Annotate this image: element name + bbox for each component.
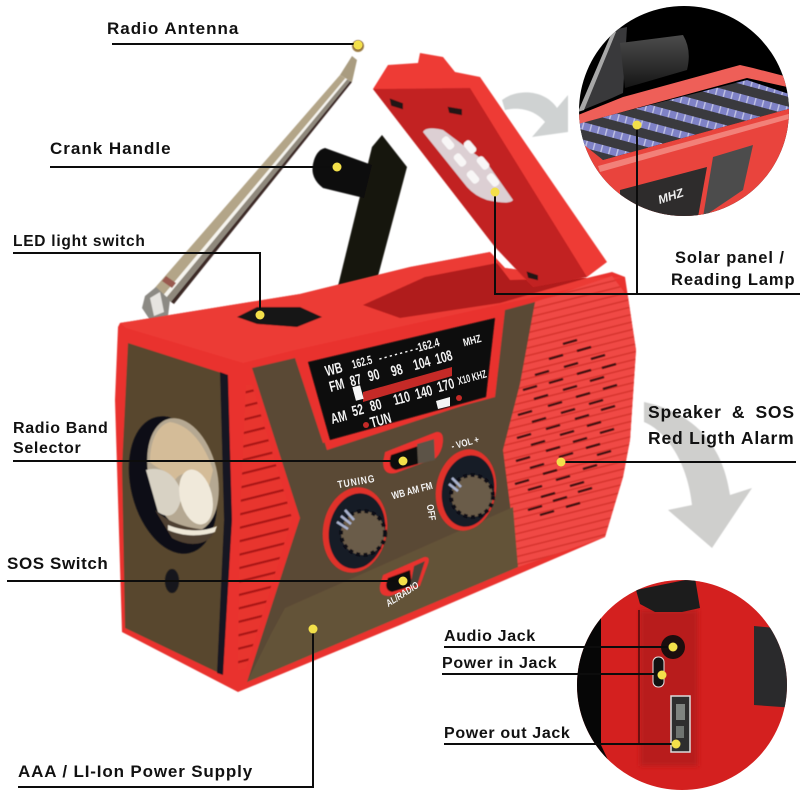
lower brown shade bbox=[247, 507, 518, 682]
radio display bbox=[308, 318, 495, 440]
label: solar panel and reading lamp: Solar panel / bbox=[675, 249, 785, 267]
gray panel front bbox=[703, 145, 753, 217]
label: speaker and SOS alarm: Speaker & SOS bbox=[648, 402, 795, 422]
lid screws bbox=[391, 100, 537, 279]
left end face bbox=[122, 343, 228, 675]
volume label: - VOL + bbox=[450, 434, 480, 452]
top recess bbox=[363, 263, 587, 318]
band labels: WB AM FM bbox=[390, 480, 434, 502]
label: radio antenna: Radio Antenna bbox=[107, 19, 239, 38]
label: speaker and SOS alarm: Red Ligth Alarm bbox=[648, 428, 794, 448]
display text: 108 bbox=[433, 346, 454, 368]
speaker holes bbox=[515, 340, 617, 515]
zoom circle: jacks bbox=[577, 580, 787, 790]
zoom circle: solar panel: MHZ bbox=[656, 185, 686, 207]
led switch bbox=[237, 307, 322, 327]
SOS button bbox=[165, 569, 179, 593]
switch label: AL/RADIO bbox=[383, 579, 421, 609]
label: radio band selector: Radio Band bbox=[13, 420, 108, 437]
radio antenna bbox=[142, 40, 364, 320]
audio jack bbox=[661, 635, 685, 659]
gray arrow: speaker downward bbox=[644, 402, 752, 548]
usb port bbox=[671, 696, 690, 752]
tuning label: TUNING bbox=[337, 473, 376, 492]
SOS switch bbox=[380, 557, 429, 596]
display text: 140 bbox=[413, 381, 434, 403]
crank cylinder bbox=[620, 35, 689, 88]
display text: - - - - - - - -162.4 bbox=[377, 336, 441, 365]
display text bbox=[323, 333, 488, 431]
chevron ribs bbox=[238, 385, 292, 670]
display text: WB bbox=[323, 358, 344, 380]
label: power out jack: Power out Jack bbox=[444, 725, 570, 742]
display text: 110 bbox=[391, 387, 412, 409]
zoom circle: solar panel bbox=[579, 6, 789, 216]
lamp bbox=[423, 128, 513, 202]
lid outer rim bbox=[373, 53, 607, 287]
volume dial bbox=[429, 444, 503, 536]
callout dots bbox=[256, 40, 680, 748]
front frame bbox=[578, 108, 792, 217]
crank handle bbox=[312, 135, 407, 286]
display text: FM bbox=[327, 375, 346, 395]
band selector switch bbox=[383, 432, 443, 474]
gray arrow: top curved bbox=[502, 92, 568, 137]
display text: 52 bbox=[350, 400, 365, 420]
solar panel lid with reading lamp bbox=[373, 53, 607, 287]
lamp LEDs bbox=[440, 135, 501, 188]
off label: OFF bbox=[424, 504, 438, 522]
label: crank handle: Crank Handle bbox=[50, 139, 172, 158]
tuning bar bbox=[363, 367, 452, 402]
lid inner face bbox=[373, 88, 587, 287]
label: SOS switch: SOS Switch bbox=[7, 554, 108, 573]
label: radio band selector: Selector bbox=[13, 440, 81, 457]
label: power supply: AAA / LI-Ion Power Supply bbox=[18, 762, 253, 781]
micro usb bbox=[653, 657, 664, 687]
label: LED light switch: LED light switch bbox=[13, 233, 146, 250]
radio body bbox=[115, 252, 636, 692]
display text: 162.5 bbox=[351, 354, 374, 372]
side grip bbox=[754, 626, 787, 708]
display text: X10 KHZ bbox=[456, 368, 488, 387]
dark panel front bbox=[620, 167, 707, 217]
port panel bbox=[640, 610, 698, 766]
crank bracket bbox=[578, 27, 627, 112]
display text: 170 bbox=[435, 374, 456, 396]
display text: 104 bbox=[411, 352, 433, 374]
display text: 80 bbox=[368, 395, 383, 415]
flashlight lens bbox=[115, 407, 231, 563]
solar lid frame bbox=[578, 65, 792, 124]
label: power in jack: Power in Jack bbox=[442, 655, 557, 672]
display bezel bbox=[297, 306, 505, 450]
display text: AM bbox=[329, 406, 349, 427]
body shell bbox=[115, 252, 636, 692]
label: audio jack: Audio Jack bbox=[444, 628, 536, 645]
front brown panel bbox=[247, 302, 535, 682]
top surface bbox=[120, 252, 625, 363]
speaker grille bbox=[503, 276, 636, 567]
solar panel cells bbox=[578, 80, 792, 160]
display text: 90 bbox=[366, 365, 381, 385]
left face dark strip bbox=[217, 372, 232, 675]
display text: 87 bbox=[348, 370, 363, 390]
top cap bbox=[636, 578, 700, 612]
display text: MHZ bbox=[462, 333, 483, 350]
label: solar panel and reading lamp: Reading Lamp bbox=[671, 271, 795, 289]
tuning dial bbox=[316, 482, 394, 578]
display text: TUN bbox=[368, 409, 393, 431]
display text: 98 bbox=[389, 360, 404, 380]
